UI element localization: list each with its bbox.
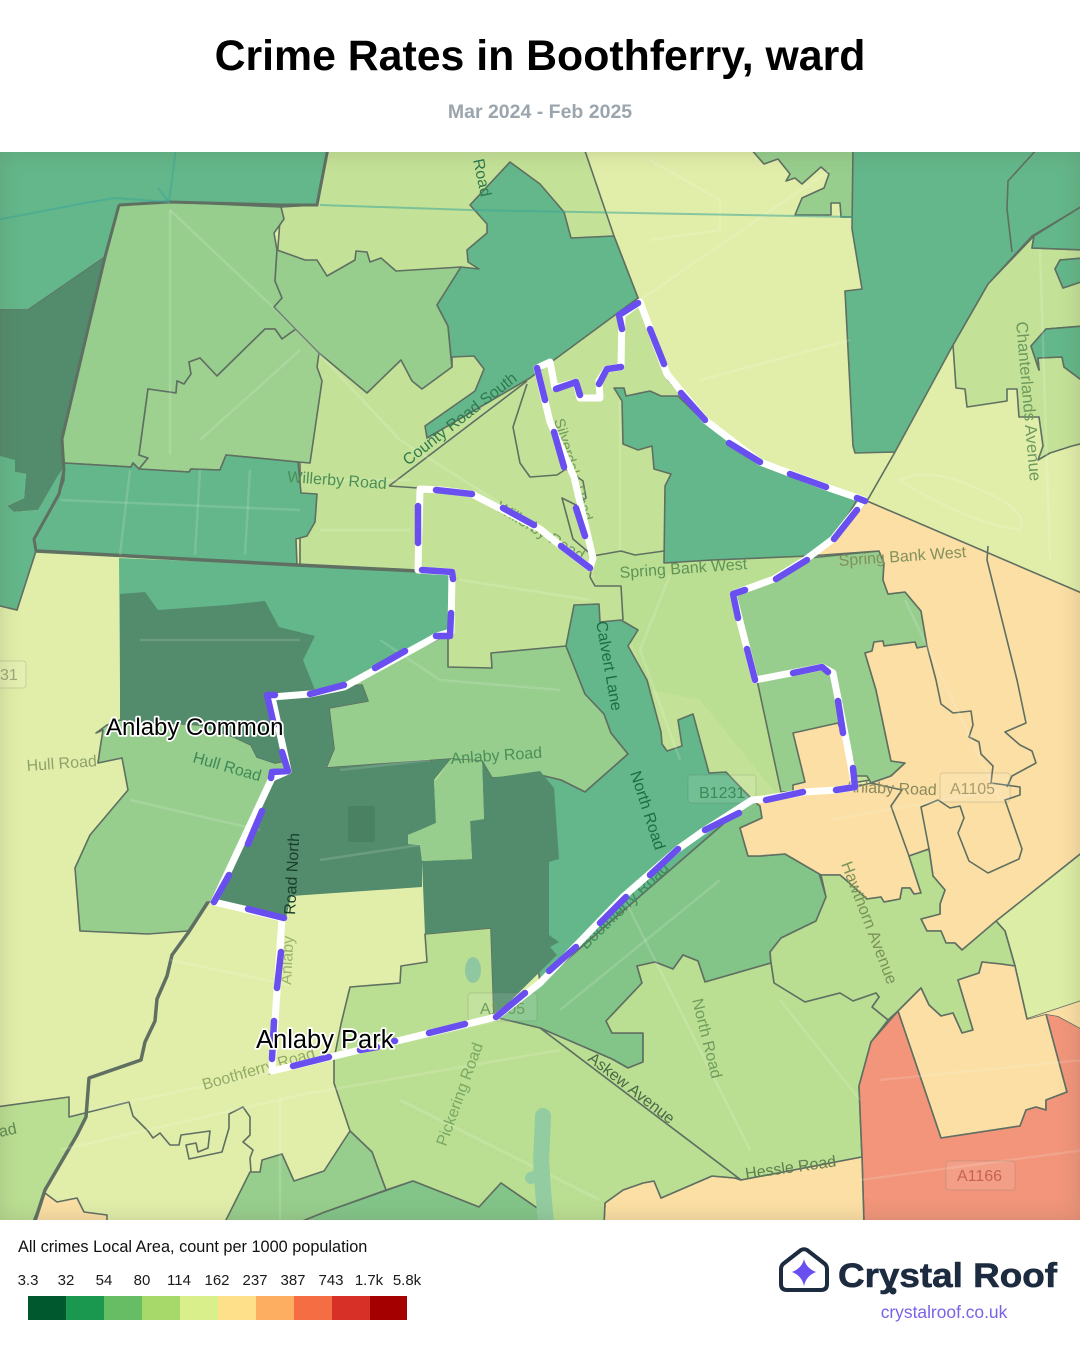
map road labels: Spring Bank West	[619, 556, 748, 582]
north star-shaped area	[274, 250, 461, 393]
subtitle: Mar 2024 - Feb 2025	[448, 101, 632, 123]
pond	[465, 957, 481, 983]
legend values: 162	[204, 1272, 230, 1289]
ward boundary: Boothferry	[214, 302, 865, 1071]
west dark area	[0, 257, 105, 512]
faint roads	[60, 160, 1080, 1224]
map road labels: North Road	[688, 997, 724, 1080]
north-west light green area	[62, 202, 296, 469]
map road labels	[0, 157, 1045, 1185]
west green strip	[0, 455, 64, 610]
top-left green area	[0, 148, 328, 310]
map road labels: Chanterlands Avenue	[1012, 321, 1045, 482]
central road-bound polygons	[389, 381, 664, 620]
map road labels: Anlaby Road	[845, 779, 937, 799]
central low-crime area	[274, 148, 879, 900]
map road labels: A1105	[480, 1001, 525, 1018]
north-east green patches	[1007, 148, 1080, 382]
map road labels: Anlaby	[278, 935, 298, 985]
south centre mid-green area	[540, 955, 888, 1180]
north-east green area	[845, 148, 1080, 453]
map road labels: Calvert Lane	[592, 620, 625, 712]
south-east peach area	[898, 962, 1067, 1138]
drain lines	[0, 148, 853, 220]
map road labels: Road North	[282, 833, 303, 915]
south green area	[224, 1131, 386, 1224]
map road labels: Pickering Road	[434, 1041, 487, 1148]
south-west peach patch	[32, 1192, 108, 1220]
north-west light green area 2	[139, 329, 322, 472]
dark central strip	[422, 761, 559, 1017]
map road labels: Hull Road	[26, 753, 97, 775]
mid-green centre strip	[593, 551, 809, 800]
ward centre green area	[614, 388, 857, 563]
south-east pale area	[996, 851, 1080, 1019]
map road labels: Road	[469, 157, 494, 198]
dark high-green west blocks	[120, 592, 451, 918]
title: Crime Rates in Boothferry, ward	[215, 32, 865, 80]
ward boundary white casing	[214, 302, 864, 1071]
east light area	[953, 236, 1080, 460]
legend values	[18, 1272, 422, 1289]
map road labels: B1231	[699, 785, 745, 802]
south peach area	[604, 1157, 864, 1224]
Calvert Lane green strip	[530, 604, 752, 983]
legend values: 54	[96, 1272, 112, 1289]
south darker green area	[303, 1180, 538, 1220]
west central green band	[34, 455, 317, 565]
north central green area	[425, 162, 638, 438]
logo icon: house with star	[781, 1249, 827, 1290]
ward boundary purple dashes	[214, 303, 865, 1066]
peach inset inside ward	[793, 723, 855, 792]
logo url: crystalroof.co.uk	[881, 1302, 1008, 1322]
map road labels: Anlaby Road	[450, 745, 543, 768]
salmon high-crime area	[859, 1011, 1080, 1224]
map area polygons	[0, 148, 1080, 1224]
south-west boundaries	[0, 1097, 253, 1172]
logo wordmark: Crystal Roof	[838, 1257, 1058, 1295]
map road labels: Hessle Road	[744, 1153, 837, 1183]
map road labels: Askew Avenue	[585, 1050, 678, 1128]
map road labels: A1105	[950, 781, 995, 798]
Hawthorn Avenue area	[770, 849, 1015, 1033]
legend values: 743	[318, 1272, 344, 1289]
legend values: 114	[167, 1272, 191, 1289]
peach sliver	[1028, 1001, 1080, 1028]
legend values: 1.7k	[355, 1272, 384, 1289]
place label: Anlaby Common: Anlaby Common	[106, 714, 283, 741]
Anlaby Common light green area	[75, 720, 289, 934]
map road labels: Hawthorn Avenue	[837, 859, 901, 987]
east light green area	[731, 551, 927, 792]
lake in park	[531, 1116, 546, 1224]
map road labels: North Road	[626, 769, 668, 852]
road shields	[0, 661, 1015, 1190]
map road labels: Spring Bank West	[838, 544, 967, 570]
Pickering park area	[334, 928, 741, 1224]
map road labels: A1166	[957, 1168, 1002, 1185]
legend values: 237	[242, 1272, 268, 1289]
darker square block	[348, 806, 375, 842]
map road labels: Hull Road	[191, 750, 263, 785]
peach east region	[740, 501, 1080, 950]
Southfery green-mid area	[494, 799, 826, 1068]
map road labels: Boothferry Road	[200, 1045, 317, 1094]
legend values: 3.3	[18, 1272, 38, 1289]
map road labels: Silverdale Road	[550, 416, 596, 523]
map road labels: Willerby Road	[287, 469, 387, 493]
south-west mid area	[0, 1097, 86, 1224]
map road labels: County Road South	[400, 370, 521, 469]
legend title: All crimes Local Area, count per 1000 population	[18, 1238, 367, 1256]
Anlaby green area	[119, 558, 452, 692]
legend swatches	[28, 1296, 407, 1320]
peach internal boundaries	[871, 546, 1036, 873]
legend values: 5.8k	[393, 1272, 422, 1289]
map road labels: Boothferry Road	[577, 860, 673, 953]
legend values: 80	[134, 1272, 150, 1289]
thick district boundary	[34, 902, 208, 1224]
south central light green area	[326, 632, 628, 792]
legend values: 32	[58, 1272, 74, 1289]
pale west bottom boundary	[36, 551, 418, 571]
map edge shading	[0, 152, 1080, 1220]
north-east pale wedge boundary	[867, 452, 895, 501]
light green island	[408, 759, 484, 861]
north-east light green patch	[752, 152, 852, 218]
map road labels: 31	[0, 667, 18, 684]
place label: Anlaby Park: Anlaby Park	[256, 1026, 394, 1054]
map road labels: Willerby Road	[493, 499, 587, 565]
legend values: 387	[280, 1272, 306, 1289]
